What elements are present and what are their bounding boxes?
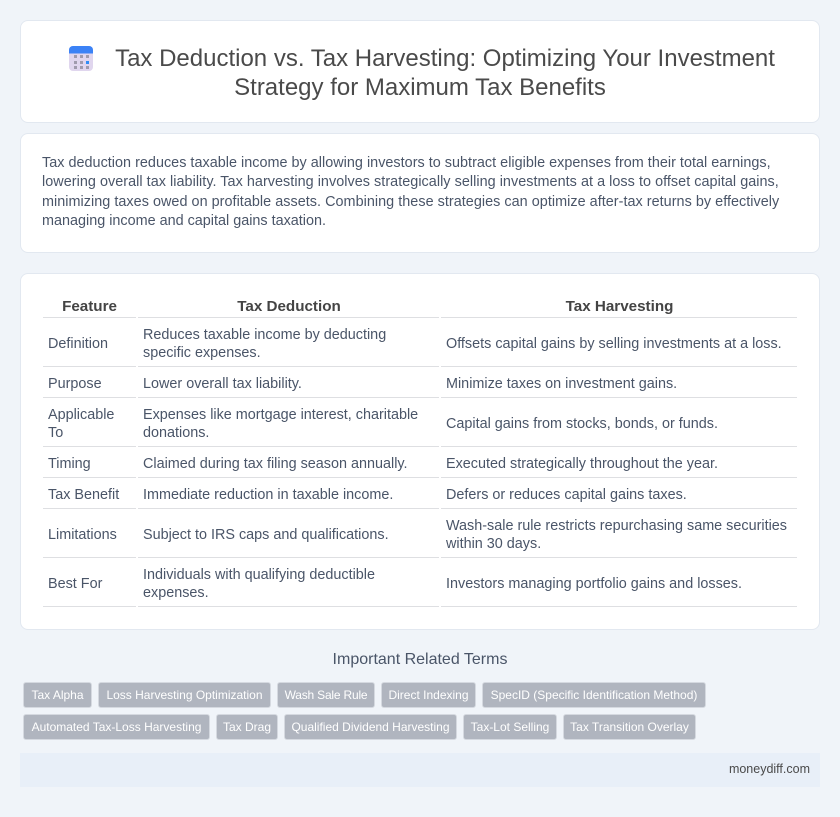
text block: introduction: lowering overall tax liability. Tax harvesting involves strategically selling investments at a loss to offset capital gains, — [42, 174, 779, 190]
row: Purpose: Lower overall tax liability. — [143, 376, 302, 392]
tag list: related terms: Tax Alpha — [31, 688, 84, 702]
row: Best For: expenses. — [143, 585, 209, 601]
tag list: related terms: SpecID (Specific Identification Method) — [491, 688, 697, 702]
icon: calendar — [69, 46, 93, 71]
row: Definition: Offsets capital gains by selling investments at a loss. — [446, 336, 782, 352]
table header — [62, 298, 673, 315]
tag list: related terms: Tax-Lot Selling — [471, 720, 549, 734]
row: Best For — [48, 567, 742, 601]
title — [115, 45, 775, 101]
tag list: related terms: Loss Harvesting Optimization — [106, 688, 263, 702]
text block: introduction: managing income and capital gains taxation. — [42, 213, 326, 229]
heading: related terms: Important Related Terms — [333, 651, 507, 668]
row: Tax Benefit: Immediate reduction in taxable income. — [143, 487, 393, 503]
footer credit: moneydiff.com — [729, 762, 810, 776]
row: Applicable To: Applicable — [48, 407, 114, 423]
row: Definition: Reduces taxable income by deducting — [143, 327, 386, 343]
table header: Tax Harvesting — [566, 298, 673, 315]
tag list: related terms: Tax Transition Overlay — [570, 720, 689, 734]
row: Limitations: Limitations — [48, 527, 117, 543]
panel: comparison table — [20, 273, 820, 630]
panel: introduction — [20, 133, 820, 253]
row: Applicable To — [48, 407, 718, 441]
tag list: related terms: Qualified Dividend Harvesting — [291, 720, 450, 734]
footer — [20, 753, 820, 787]
row: Tax Benefit: Tax Benefit — [48, 487, 119, 503]
tag list: related terms: Direct Indexing — [388, 688, 469, 702]
row: Applicable To: donations. — [143, 425, 209, 441]
row: Timing: Claimed during tax filing season annually. — [143, 456, 408, 472]
row: Definition: specific expenses. — [143, 345, 261, 361]
table header: Tax Deduction — [237, 298, 341, 315]
row: Purpose: Purpose — [48, 376, 102, 392]
tag list: related terms: Automated Tax-Loss Harvesting — [32, 720, 201, 734]
title: Tax Deduction vs. Tax Harvesting: Optimizing Your Investment — [115, 45, 775, 72]
table header: Feature — [62, 298, 117, 315]
row: Purpose: Minimize taxes on investment gains. — [446, 376, 677, 392]
row: Best For: Best For — [48, 576, 102, 592]
row: Definition: Definition — [48, 336, 108, 352]
tag list: related terms: Wash Sale Rule — [285, 688, 367, 702]
row: Limitations: Subject to IRS caps and qualifications. — [143, 527, 389, 543]
row: Timing: Executed strategically throughout the year. — [446, 456, 718, 472]
row: Limitations: Wash-sale rule restricts repurchasing same securities — [446, 518, 787, 534]
text block: introduction: minimizing taxes owed on profitable assets. Combining these strategies can optimize after-tax returns by effectively — [42, 194, 779, 210]
panel: header — [20, 20, 820, 123]
row: Applicable To: To — [48, 425, 63, 441]
text block: introduction: Tax deduction reduces taxable income by allowing investors to subtract eligible expenses from their total earnings, — [42, 155, 771, 171]
row: Definition — [48, 327, 782, 361]
tag list: related terms — [23, 682, 706, 740]
title: Strategy for Maximum Tax Benefits — [234, 74, 606, 101]
row: Timing — [48, 456, 718, 472]
text block: introduction — [42, 155, 780, 229]
row: Purpose — [48, 376, 677, 392]
row: Limitations: within 30 days. — [446, 536, 541, 552]
row: Tax Benefit: Defers or reduces capital gains taxes. — [446, 487, 687, 503]
row: Applicable To: Capital gains from stocks, bonds, or funds. — [446, 416, 718, 432]
row: Best For: Investors managing portfolio gains and losses. — [446, 576, 742, 592]
row: Tax Benefit — [48, 487, 687, 503]
tag list: related terms: Tax Drag — [223, 720, 271, 734]
row: Timing: Timing — [48, 456, 91, 472]
row: Applicable To: Expenses like mortgage interest, charitable — [143, 407, 418, 423]
row: Best For: Individuals with qualifying deductible — [143, 567, 375, 583]
row: Limitations — [48, 518, 787, 552]
